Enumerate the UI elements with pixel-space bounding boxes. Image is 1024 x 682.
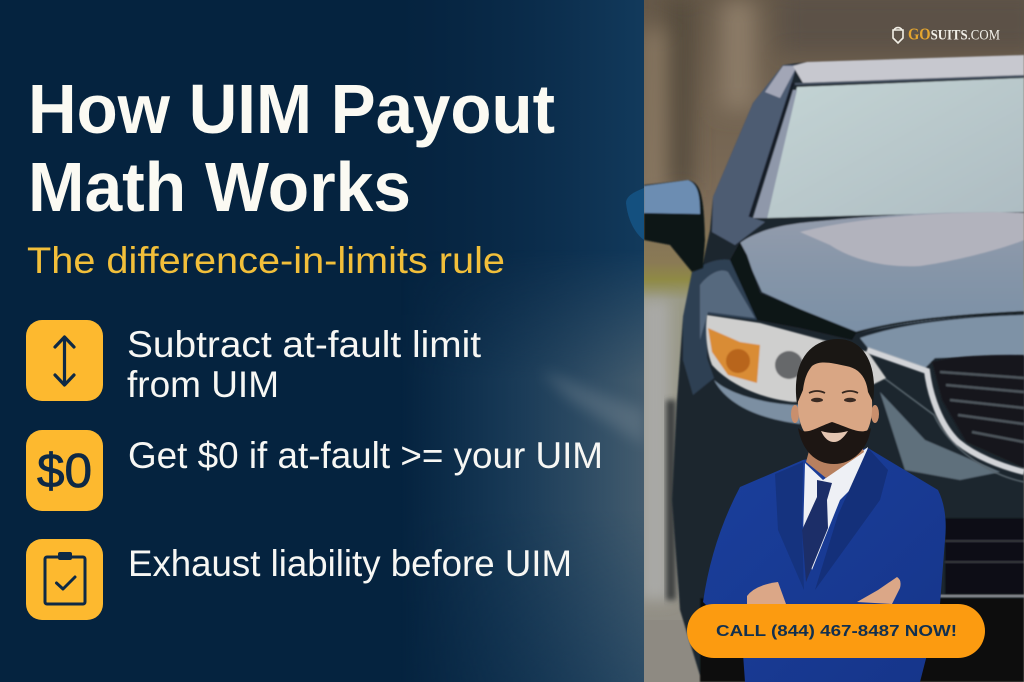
ears xyxy=(791,405,799,423)
bumper highlight xyxy=(714,380,800,424)
jacket xyxy=(703,448,946,682)
title xyxy=(28,70,555,226)
logo wordmark: GOSUITS.COM xyxy=(908,24,1000,44)
item 1: subtract xyxy=(26,320,491,405)
headlight xyxy=(706,315,886,402)
blurred background xyxy=(640,0,1024,682)
shirt xyxy=(803,447,868,570)
mirror xyxy=(644,180,705,272)
icon: $0 xyxy=(26,430,103,511)
car body xyxy=(672,55,1024,682)
roof xyxy=(793,55,1024,83)
hair xyxy=(796,339,874,404)
subtitle: The difference-in-limits rule xyxy=(27,240,505,281)
icon: clipboard check xyxy=(26,539,103,620)
item 2: zero payout xyxy=(26,430,603,511)
lower hood xyxy=(860,315,1024,368)
lower grille xyxy=(945,518,1024,596)
panel: car photo xyxy=(640,0,1024,682)
item text: from UIM xyxy=(127,364,279,405)
icon: up-down arrow xyxy=(26,320,103,401)
title: Math Works xyxy=(28,148,411,226)
mirror tip through panel xyxy=(626,188,644,240)
hood xyxy=(740,212,1024,334)
person xyxy=(703,339,946,682)
eyes xyxy=(811,398,823,402)
item text: Exhaust liability before UIM xyxy=(128,543,572,584)
windshield xyxy=(767,78,1024,218)
bonnet gap xyxy=(730,242,857,340)
icon: lock xyxy=(893,28,903,43)
logo: gosuits.com xyxy=(893,24,1000,44)
hands xyxy=(747,582,786,604)
item text: Get $0 if at-fault >= your UIM xyxy=(128,435,603,476)
title: How UIM Payout xyxy=(28,70,555,148)
silhouette xyxy=(672,55,1024,682)
neck xyxy=(806,448,864,478)
item 3: exhaust xyxy=(26,539,572,620)
fender xyxy=(683,260,757,395)
face xyxy=(798,362,872,432)
grille xyxy=(867,350,1024,482)
item text: Subtract at-fault limit xyxy=(127,324,482,365)
tie xyxy=(802,480,832,582)
icon: $0: $0 xyxy=(37,445,92,498)
lapels xyxy=(775,462,804,590)
call to action button xyxy=(687,604,985,658)
panel: navy text panel xyxy=(436,0,644,682)
pillar xyxy=(712,65,797,245)
beard xyxy=(798,422,871,464)
call to action button: CALL (844) 467-8487 NOW! xyxy=(716,623,957,640)
